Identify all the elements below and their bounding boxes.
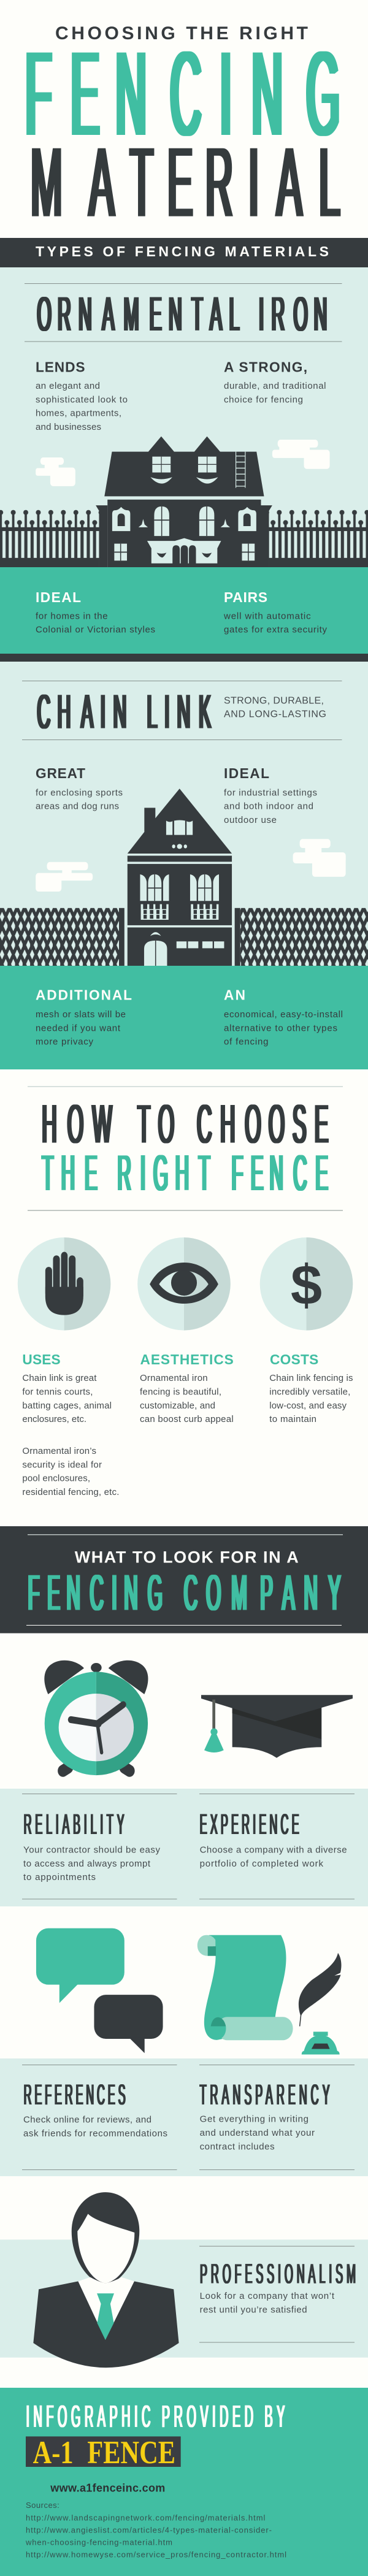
panel: reliability: RELIABILITY: [24, 1808, 125, 1841]
sources: http://www.landscapingnetwork.com/fencing/materials.html: [26, 2513, 266, 2522]
text block: pairs: gates for extra security: [224, 625, 328, 635]
panel: footer: [0, 2388, 368, 2576]
panel: reliability: to appointments: [23, 1872, 96, 1882]
sources: [25, 2501, 286, 2559]
heading: chain link: CHAIN LINK: [37, 684, 211, 739]
text block: an: alternative to other types: [224, 1023, 337, 1033]
text block: professionalism: Look for a company that won’t: [200, 2291, 335, 2301]
text block: ideal: outdoor use: [224, 815, 277, 825]
text block: pairs: [223, 589, 328, 635]
panel: experience: portfolio of completed work: [200, 1859, 324, 1869]
title: material: MATERIAL: [31, 126, 340, 237]
panel: transparency: [199, 2065, 355, 2170]
logo: a-1 fence: [26, 2435, 181, 2471]
heading: how to choose: HOW TO CHOOSE: [42, 1094, 328, 1155]
sources: when-choosing-fencing-material.htm: [25, 2537, 172, 2547]
tagline: [224, 695, 326, 720]
panel: transparency: and understand what your: [200, 2128, 315, 2138]
panel: experience: EXPERIENCE: [200, 1808, 299, 1841]
sources: http://www.angieslist.com/articles/4-types-material-consider-: [26, 2525, 272, 2534]
text block: uses: enclosures, etc.: [22, 1414, 86, 1424]
illustration: victorian house with iron fence: [0, 437, 368, 567]
panel: ornamental iron teal band: [0, 567, 368, 662]
cloud left: [36, 862, 93, 892]
text block: lends: an elegant and: [36, 381, 100, 391]
text block: uses: [22, 1351, 119, 1497]
panel: chain link: [0, 662, 368, 966]
text block: a strong: choice for fencing: [224, 394, 303, 405]
text block: ideal: [36, 589, 155, 635]
text block: ideal: for industrial settings: [224, 787, 317, 798]
text block: an: of fencing: [224, 1037, 269, 1047]
text block: great: areas and dog runs: [36, 801, 119, 812]
text block: lends: sophisticated look to: [36, 394, 128, 405]
text block: aesthetics: customizable, and: [140, 1401, 215, 1411]
panel: references: ask friends for recommendations: [23, 2128, 167, 2139]
text block: uses: security is ideal for: [22, 1459, 102, 1470]
chain link fence right: [235, 908, 368, 966]
text block: additional: mesh or slats will be: [36, 1009, 126, 1020]
text block: great: for enclosing sports: [36, 787, 123, 798]
text block: pairs: PAIRS: [224, 589, 267, 605]
text block: lends: homes, apartments,: [36, 408, 121, 419]
sources: Sources:: [26, 2501, 59, 2510]
illustration: house with chain link fence: [0, 789, 368, 966]
text block: an: economical, easy-to-install: [224, 1009, 343, 1020]
panel: reliability: [0, 1789, 368, 1906]
text block: costs: to maintain: [269, 1414, 316, 1424]
text block: lends: LENDS: [36, 359, 85, 375]
banner: what to look for in a fencing company: [0, 1526, 368, 1634]
panel: experience: Choose a company with a diverse: [200, 1844, 347, 1855]
heading: fencing company: FENCING COMPANY: [28, 1565, 341, 1621]
house: [96, 437, 272, 567]
text block: aesthetics: Ornamental iron: [140, 1373, 208, 1383]
panel: chain link teal band: [0, 966, 368, 1069]
sources: http://www.homewyse.com/service_pros/fencing_contractor.html: [26, 2550, 286, 2559]
panel: experience: [199, 1794, 355, 1900]
text block: professionalism: rest until you’re satisfied: [200, 2304, 307, 2315]
text block: aesthetics: AESTHETICS: [140, 1351, 234, 1367]
text block: aesthetics: can boost curb appeal: [140, 1414, 234, 1424]
text block: a strong: [224, 359, 326, 405]
heading: what to look for in a: WHAT TO LOOK FOR IN A: [75, 1548, 299, 1567]
ladder: [236, 452, 245, 488]
panel: reliability: Your contractor should be easy: [23, 1844, 161, 1855]
text block: uses: pool enclosures,: [22, 1473, 90, 1484]
icon: dollar sign: $: [291, 1254, 322, 1317]
text block: additional: needed if you want: [36, 1023, 121, 1033]
text block: ideal: IDEAL: [224, 765, 269, 781]
text block: aesthetics: fencing is beautiful,: [140, 1387, 221, 1397]
text block: costs: COSTS: [270, 1351, 318, 1367]
text block: aesthetics: [140, 1351, 234, 1424]
icon: graduation cap: [201, 1695, 353, 1758]
title: choosing the right: CHOOSING THE RIGHT: [55, 23, 308, 44]
text block: professionalism: [199, 2245, 356, 2342]
banner: types of fencing materials: TYPES OF FENCING MATERIALS: [36, 243, 329, 259]
panel: ornamental iron: [0, 267, 368, 568]
text block: costs: incredibly versatile,: [269, 1387, 350, 1397]
panel: transparency: contract includes: [200, 2141, 275, 2152]
fence right: [269, 508, 368, 567]
cloud right: [293, 839, 346, 877]
text block: pairs: well with automatic: [223, 611, 311, 621]
text block: a strong: durable, and traditional: [224, 381, 326, 391]
text block: ideal: and both indoor and: [224, 801, 313, 812]
cloud left: [36, 457, 75, 486]
icon: businessman: [33, 2192, 179, 2368]
text block: uses: for tennis courts,: [22, 1387, 93, 1397]
text block: an: AN: [224, 987, 245, 1003]
website: www.a1fenceinc.com: [50, 2482, 165, 2494]
text block: professionalism: PROFESSIONALISM: [200, 2259, 356, 2290]
banner: types of fencing materials: [0, 238, 368, 267]
text block: ideal: for homes in the: [36, 611, 108, 621]
text block: uses: batting cages, animal: [22, 1401, 112, 1411]
text block: costs: [269, 1351, 353, 1424]
text block: uses: Ornamental iron’s: [22, 1446, 96, 1456]
text block: great: GREAT: [36, 765, 85, 781]
logo: a-1 fence: A-1: [33, 2435, 74, 2471]
icon: eye: [137, 1237, 231, 1331]
text block: lends: [36, 359, 128, 432]
text block: uses: residential fencing, etc.: [22, 1487, 119, 1497]
logo: a-1 fence: FENCE: [87, 2435, 175, 2471]
fence left: [0, 508, 99, 567]
house: [128, 789, 232, 966]
heading: ornamental iron: ORNAMENTAL IRON: [37, 286, 327, 341]
text block: additional: more privacy: [36, 1037, 93, 1047]
chain link fence left: [0, 908, 125, 966]
icon: speech bubbles: [36, 1928, 163, 2053]
panel: title header: [25, 23, 340, 237]
icon: scroll, quill and inkwell: [197, 1935, 341, 2054]
panel: references: REFERENCES: [24, 2079, 126, 2111]
panel: transparency: Get everything in writing: [200, 2114, 309, 2125]
cloud right: [272, 440, 330, 469]
panel: references: Check online for reviews, and: [23, 2115, 151, 2125]
text block: ideal: Colonial or Victorian styles: [36, 625, 155, 635]
text block: lends: and businesses: [36, 422, 101, 432]
text block: ideal: [224, 765, 317, 825]
text block: uses: Chain link is great: [22, 1373, 97, 1383]
text block: additional: [36, 987, 132, 1047]
panel: references: [0, 2058, 368, 2176]
heading: the right fence: THE RIGHT FENCE: [42, 1145, 328, 1202]
icon: dollar sign: [260, 1237, 353, 1331]
tagline: STRONG, DURABLE,: [224, 695, 324, 706]
icon: hand: [18, 1237, 110, 1331]
text block: great: [36, 765, 123, 812]
panel: professionalism band: [0, 2239, 368, 2358]
text block: uses: USES: [22, 1351, 61, 1367]
title: fencing: FENCING: [25, 27, 340, 161]
text block: ideal: IDEAL: [36, 589, 81, 605]
heading: infographic provided by: INFOGRAPHIC PROVIDED BY: [26, 2399, 285, 2434]
text block: an: [224, 987, 343, 1047]
text block: costs: Chain link fencing is: [269, 1373, 353, 1383]
panel: reliability: to access and always prompt: [23, 1859, 151, 1869]
panel: transparency: TRANSPARENCY: [200, 2079, 330, 2111]
panel: how to choose the right fence: [18, 1087, 353, 1497]
icon: alarm clock: [44, 1661, 148, 1775]
text block: additional: ADDITIONAL: [36, 987, 132, 1003]
tagline: AND LONG-LASTING: [224, 709, 326, 720]
text block: costs: low-cost, and easy: [269, 1401, 347, 1411]
text block: a strong: A STRONG,: [224, 359, 307, 375]
